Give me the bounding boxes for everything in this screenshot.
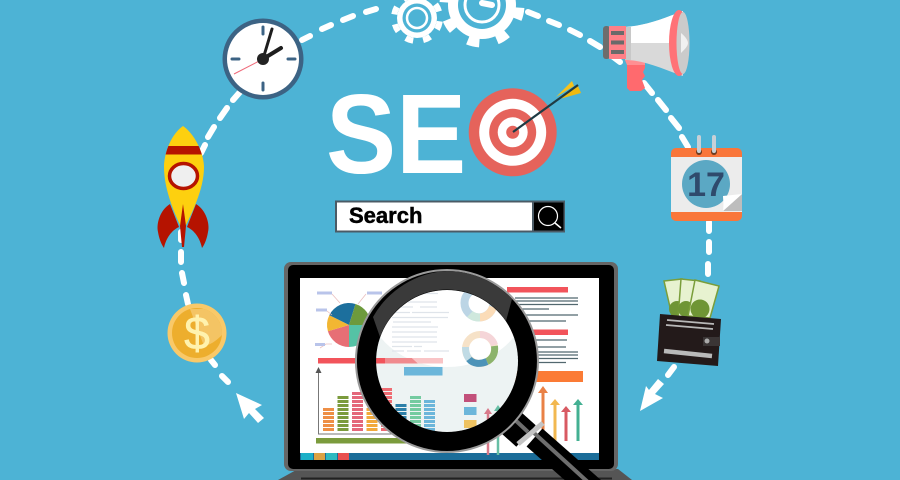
arrow: path start cursor bbox=[236, 393, 264, 423]
arrow heads bbox=[538, 386, 583, 412]
icon: gears bbox=[390, 0, 523, 46]
bar chart bbox=[328, 388, 430, 431]
magnifying glass lens background bbox=[376, 330, 518, 432]
icon: wallet with cash bbox=[657, 279, 721, 366]
dashed circular path bbox=[181, 9, 709, 382]
icon: dollar coin bbox=[168, 304, 226, 362]
pie chart bbox=[315, 293, 382, 348]
icon: dollar coin: $ bbox=[184, 307, 210, 359]
SEO infographic scene bbox=[158, 0, 742, 480]
laptop bbox=[278, 262, 632, 480]
orange banner bbox=[464, 371, 583, 382]
magnifying glass ring bbox=[355, 269, 539, 453]
icon: clock bbox=[222, 18, 304, 100]
legend squares bbox=[464, 394, 502, 455]
search bar bbox=[335, 200, 565, 232]
icon: rocket bbox=[158, 126, 208, 248]
arrow chart bbox=[543, 390, 578, 456]
icon: calendar bbox=[671, 137, 742, 221]
arrow: path end bbox=[640, 379, 664, 411]
search bar: Search bbox=[349, 203, 422, 228]
title: SEO bbox=[326, 72, 581, 198]
chart axes and footer bar bbox=[316, 358, 443, 444]
lens donut charts bbox=[464, 288, 495, 364]
magnifying glass handle bbox=[506, 418, 602, 480]
report text blocks bbox=[507, 287, 578, 362]
icon: megaphone bbox=[603, 10, 690, 91]
icon: target with arrow bbox=[469, 81, 581, 176]
calendar date: 17 bbox=[687, 166, 725, 204]
lens text lines bbox=[392, 294, 449, 351]
title: SEO: SE bbox=[326, 72, 466, 198]
